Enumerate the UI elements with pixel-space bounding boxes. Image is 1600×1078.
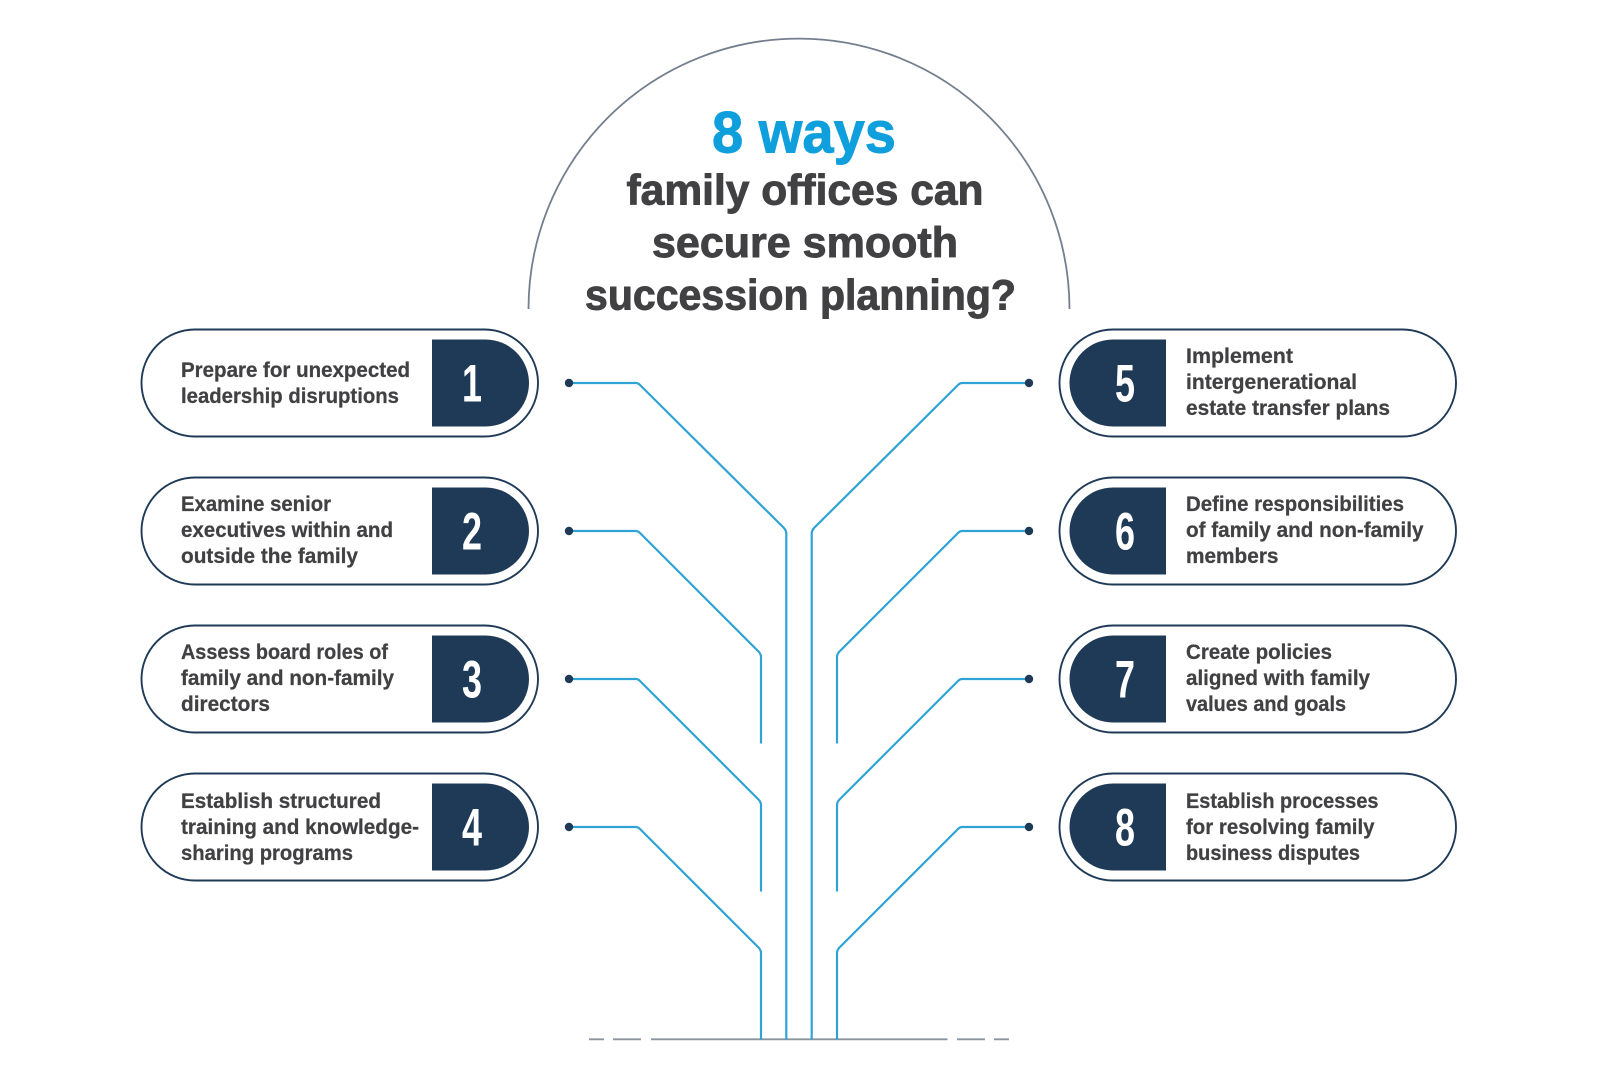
panel: step 5: 5	[1115, 354, 1135, 414]
panel: step 8	[1060, 774, 1456, 880]
panel: step 6: Define responsibilities	[1186, 493, 1404, 516]
panel: step 2: executives within and	[181, 519, 393, 542]
panel: step 2: outside the family	[181, 545, 358, 568]
panel: step 3: Assess board roles of	[181, 641, 389, 664]
panel: step 7: Create policies	[1186, 641, 1332, 664]
panel: step 2: 2	[462, 502, 482, 562]
panel: step 1: Prepare for unexpected	[181, 359, 410, 382]
title	[585, 100, 1016, 320]
panel: step 8: 8	[1115, 798, 1135, 858]
panel: step 7	[1060, 626, 1456, 732]
panel: step 3: 3	[462, 650, 482, 710]
panel: step 2	[142, 478, 538, 584]
panel: step 1	[142, 330, 538, 436]
title: secure smooth	[652, 220, 958, 267]
arch around title	[528, 39, 1070, 309]
panel: step 5: Implement	[1186, 345, 1293, 368]
panel: step 5: estate transfer plans	[1186, 397, 1390, 420]
panel: step 5	[1060, 330, 1456, 436]
panel: step 8: business disputes	[1186, 842, 1360, 865]
panel: step 4: 4	[462, 798, 482, 858]
panel: step 8: for resolving family	[1186, 816, 1375, 839]
title: succession planning?	[585, 272, 1016, 320]
ground line	[589, 1038, 1009, 1040]
panel: step 6: members	[1186, 545, 1278, 568]
panel: step 2: Examine senior	[181, 493, 331, 516]
panel: step 6: 6	[1115, 502, 1135, 562]
title: 8 ways	[712, 100, 896, 166]
connector tree: left branches	[565, 379, 786, 1040]
title: family offices can	[626, 168, 984, 214]
panel: step 4: training and knowledge-	[181, 816, 419, 839]
panel: step 4	[142, 774, 538, 880]
panel: step 3	[142, 626, 538, 732]
panel: step 3: directors	[181, 693, 270, 716]
panel: step 4: sharing programs	[181, 842, 353, 865]
panel: step 6: of family and non-family	[1186, 519, 1424, 542]
panel: step 7: values and goals	[1186, 693, 1346, 716]
panel: step 1: 1	[462, 354, 482, 414]
panel: step 7: 7	[1115, 650, 1135, 710]
connector tree: right branches	[812, 379, 1033, 1040]
panel: step 1: leadership disruptions	[181, 385, 399, 408]
panel: step 3: family and non-family	[181, 667, 394, 690]
panel: step 7: aligned with family	[1186, 667, 1370, 690]
panel: step 8: Establish processes	[1186, 790, 1378, 813]
panel: step 5: intergenerational	[1186, 371, 1357, 394]
panel: step 6	[1060, 478, 1456, 584]
panel: step 4: Establish structured	[181, 790, 381, 813]
